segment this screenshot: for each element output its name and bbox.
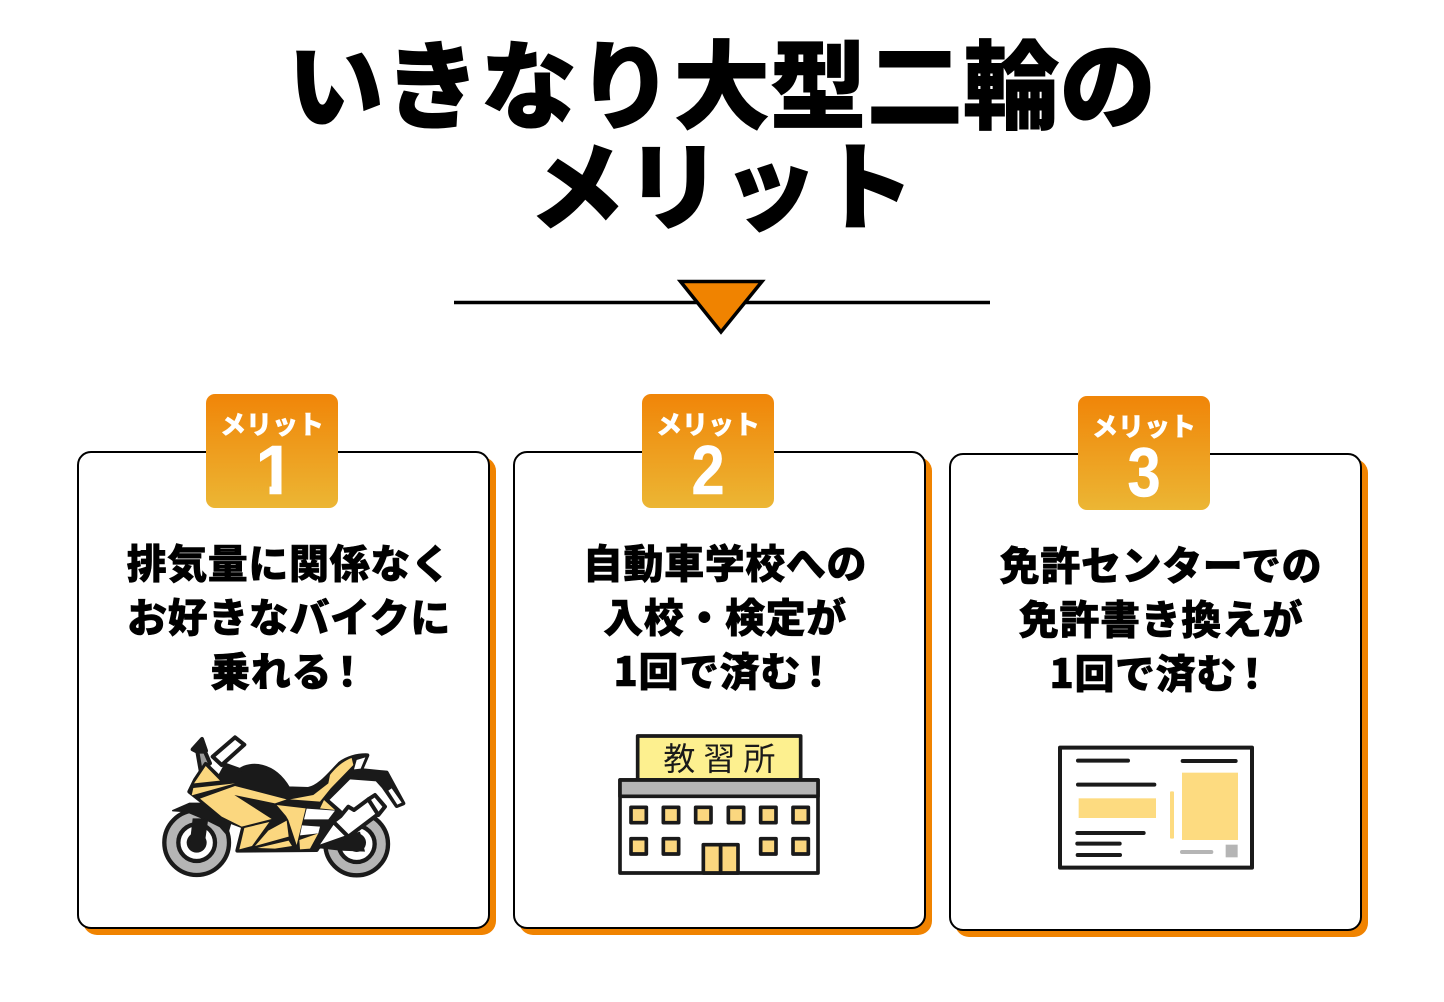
text: merit 1: 排気量に関係なく	[127, 532, 451, 590]
text: merit 3: 1回で済む！	[1050, 642, 1272, 700]
text: merit 2	[583, 532, 867, 698]
badge: merit 2: メリット	[656, 405, 760, 442]
badge: merit 2: 2	[691, 431, 725, 509]
icon: motorcycle	[162, 735, 406, 878]
badge: merit 2	[642, 394, 774, 508]
badge: merit 1: 1	[256, 431, 294, 509]
text: merit 3: 免許書き換えが	[1019, 588, 1303, 646]
badge: merit 3	[1078, 396, 1210, 510]
title: メリット	[529, 111, 915, 250]
card 2 frame	[512, 450, 926, 928]
panel: merit 2	[513, 394, 932, 935]
text: merit 2: 1回で済む！	[614, 640, 836, 698]
title: いきなり大型二輪の	[288, 10, 1156, 149]
panel: merit 1	[77, 394, 496, 935]
title	[288, 10, 1156, 250]
panel: merit 3	[949, 396, 1368, 937]
icon: driving school building	[618, 734, 820, 875]
card 1 frame	[76, 450, 490, 928]
card 3 frame	[948, 452, 1362, 930]
icon: driver's license	[1058, 746, 1254, 870]
text: merit 3	[1000, 534, 1322, 700]
text: merit 3: 免許センターでの	[1000, 534, 1322, 592]
badge: merit 3: 3	[1127, 433, 1161, 511]
text: merit 1	[127, 532, 451, 698]
text: merit 2: 入校・検定が	[603, 586, 847, 644]
text: merit 1: 乗れる！	[210, 640, 368, 698]
divider with downward arrow	[454, 280, 990, 335]
badge: merit 1: メリット	[220, 405, 324, 442]
icon: driving school building: 教習所	[663, 734, 783, 780]
badge: merit 1	[206, 394, 338, 508]
badge: merit 3: メリット	[1092, 407, 1196, 444]
text: merit 1: お好きなバイクに	[127, 586, 451, 644]
text: merit 2: 自動車学校への	[583, 532, 867, 590]
